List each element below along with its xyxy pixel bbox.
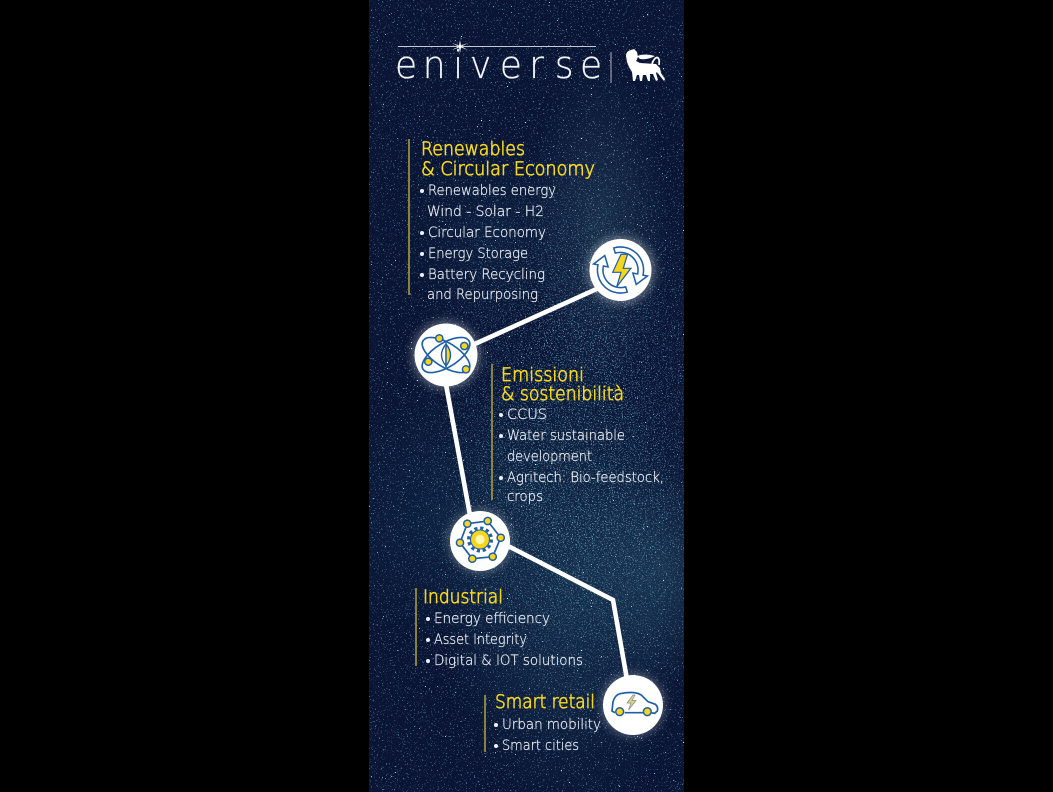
heading: Smart retail: Smart retail xyxy=(495,691,595,713)
text block: Industrial xyxy=(423,586,583,669)
text block: Renewables & Circular Economy: Wind - Solar - H2 xyxy=(427,204,544,220)
icon: six-legged dog logo xyxy=(626,49,665,81)
text block: Emissioni & sostenibilità xyxy=(499,364,664,505)
accent bars xyxy=(409,139,492,752)
text block: Renewables & Circular Economy: Energy Storage xyxy=(428,246,528,262)
text block: Renewables & Circular Economy: & Circular Economy xyxy=(421,158,595,180)
text block: Renewables & Circular Economy xyxy=(420,138,595,303)
heading: Emissioni: Emissioni xyxy=(501,364,584,386)
text block: Renewables & Circular Economy: Circular Economy xyxy=(428,225,546,241)
text block: Renewables & Circular Economy: Battery Recycling xyxy=(428,267,545,283)
text block: Emissioni & sostenibilità: crops xyxy=(507,489,543,505)
route line connecting the icons xyxy=(441,278,632,705)
text block: Emissioni & sostenibilità: development xyxy=(507,449,592,465)
text block: Renewables & Circular Economy: Renewables energy xyxy=(428,183,556,199)
text block: Emissioni & sostenibilità: Water sustainable xyxy=(507,428,625,444)
panel: starry night background xyxy=(369,0,684,792)
heading: Industrial: Industrial xyxy=(423,586,503,608)
text block: Industrial: Energy efficiency xyxy=(434,611,550,627)
text block: Smart retail: Smart cities xyxy=(502,738,579,754)
text block: Emissioni & sostenibilità: Agritech: Bio-feedstock, xyxy=(507,470,664,486)
icon: recycling arrows with lightning bolt xyxy=(586,235,656,305)
icon: electric car xyxy=(600,672,666,738)
logo: eniverse wordmark with star line: eniverse xyxy=(395,43,602,87)
text block: Industrial: Digital & IOT solutions xyxy=(434,653,583,669)
text block: Emissioni & sostenibilità: CCUS xyxy=(507,407,547,423)
text block: Emissioni & sostenibilità: & sostenibilità xyxy=(501,383,624,405)
text block: Smart retail: Urban mobility xyxy=(502,717,601,733)
text block: Smart retail xyxy=(494,691,601,754)
text block: Industrial: Asset Integrity xyxy=(434,632,527,648)
icon: atom with leaf xyxy=(411,320,481,390)
icon: gear network xyxy=(447,508,513,574)
logo divider xyxy=(610,52,612,83)
text block: Renewables & Circular Economy: and Repurposing xyxy=(427,287,538,303)
heading: Renewables: Renewables xyxy=(421,138,525,160)
